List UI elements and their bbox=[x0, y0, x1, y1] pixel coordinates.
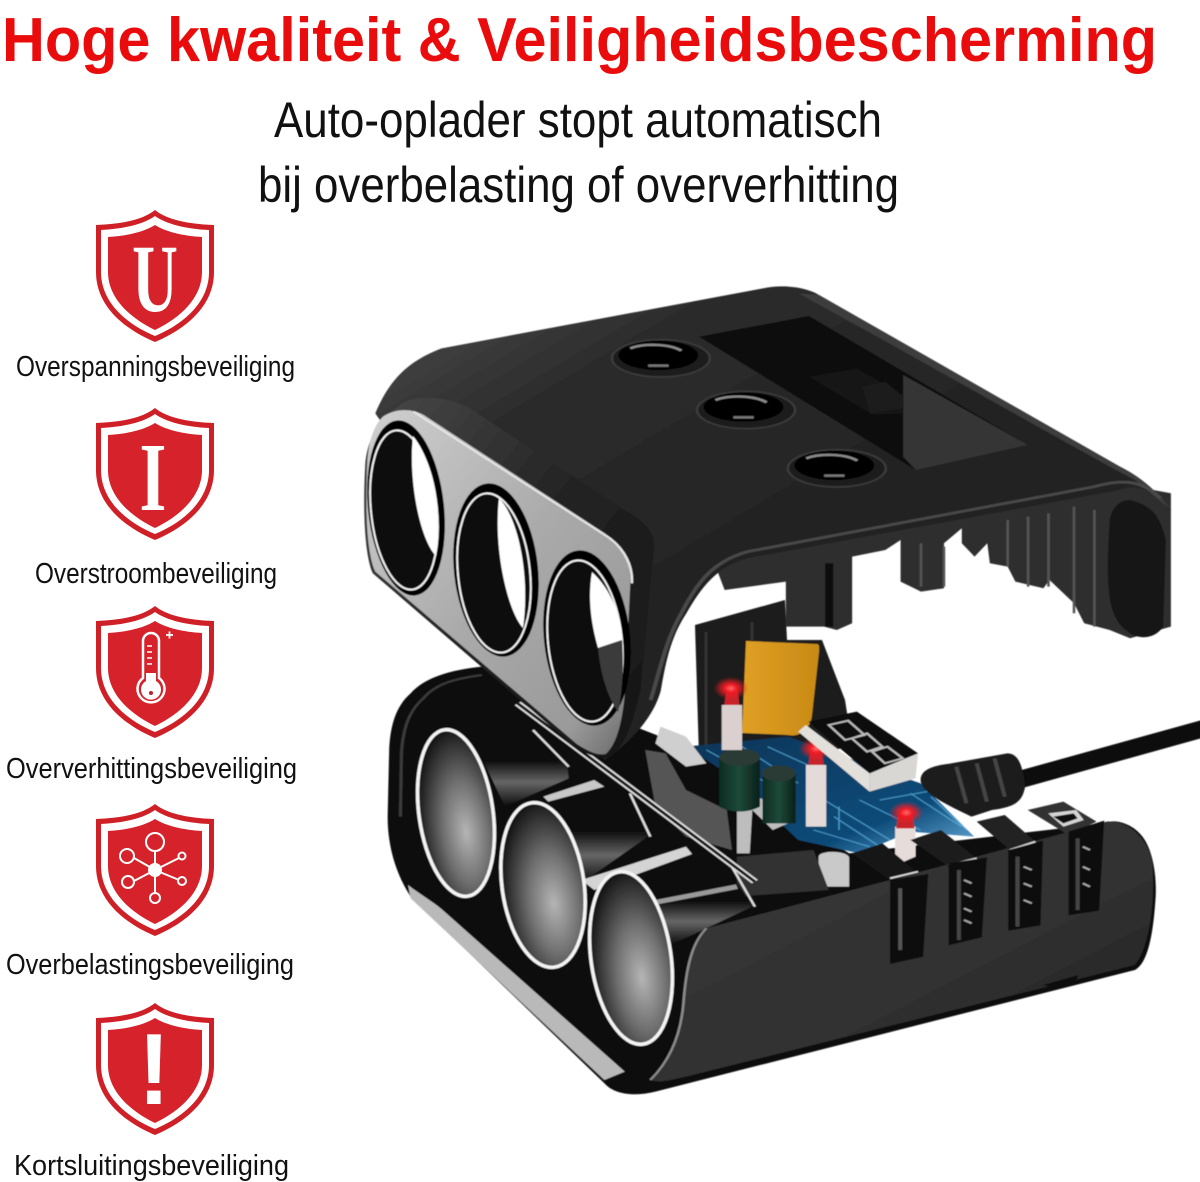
socket openings bbox=[408, 725, 683, 1050]
rear wall and yellow card bbox=[695, 600, 852, 790]
subtitle bbox=[258, 92, 899, 213]
right edge highlight bbox=[799, 293, 1171, 510]
icon: shield exclamation short circuit: ! bbox=[138, 1013, 170, 1126]
indicator lights bbox=[722, 705, 742, 750]
rim highlight bbox=[651, 482, 1161, 700]
front plate with dark surround band bbox=[364, 398, 654, 758]
title: Hoge kwaliteit & Veiligheidsbescherming bbox=[2, 6, 1157, 75]
lower housing bbox=[388, 667, 1200, 1094]
display window bbox=[699, 316, 1028, 470]
underside ribs bbox=[717, 480, 1171, 638]
product: car charger exploded view bbox=[359, 286, 1200, 1094]
front face bbox=[650, 822, 1153, 1081]
housing top surface bbox=[375, 286, 1171, 760]
USB port tops bbox=[852, 843, 918, 880]
icon: shield exclamation short circuit bbox=[96, 1003, 214, 1135]
base foot bbox=[1043, 975, 1079, 987]
subtitle: bij overbelasting of oververhitting bbox=[258, 157, 899, 213]
connector posts and chrome parts bbox=[655, 727, 706, 767]
upper metal rod bbox=[518, 703, 755, 882]
label: overheating: Oververhittingsbeveiliging bbox=[6, 753, 297, 785]
icon: shield nodes overload bbox=[96, 804, 214, 936]
cable and plug bbox=[1012, 725, 1200, 782]
icon: shield I overcurrent bbox=[96, 408, 214, 540]
subtitle: Auto-oplader stopt automatisch bbox=[274, 92, 882, 148]
icon: shield thermometer overheating bbox=[96, 606, 214, 738]
upper housing bbox=[375, 286, 1171, 760]
socket holes in plate bbox=[359, 417, 639, 730]
digital display module bbox=[798, 725, 870, 792]
buttons bbox=[612, 340, 710, 377]
label: overcurrent: Overstroombeveiliging bbox=[35, 558, 277, 590]
socket tubes bbox=[472, 725, 569, 807]
USB ports bbox=[890, 821, 1104, 964]
printed circuit board bbox=[686, 737, 974, 853]
capacitors bbox=[719, 757, 760, 812]
label: overvoltage: Overspanningsbeveiliging bbox=[16, 351, 295, 383]
icon: shield U overvoltage: U bbox=[132, 226, 178, 332]
icon: shield I overcurrent: I bbox=[140, 423, 166, 532]
label: short circuit: Kortsluitingsbeveiliging bbox=[14, 1150, 289, 1182]
label: overload: Overbelastingsbeveiliging bbox=[6, 949, 294, 981]
icon: shield U overvoltage bbox=[96, 210, 214, 342]
